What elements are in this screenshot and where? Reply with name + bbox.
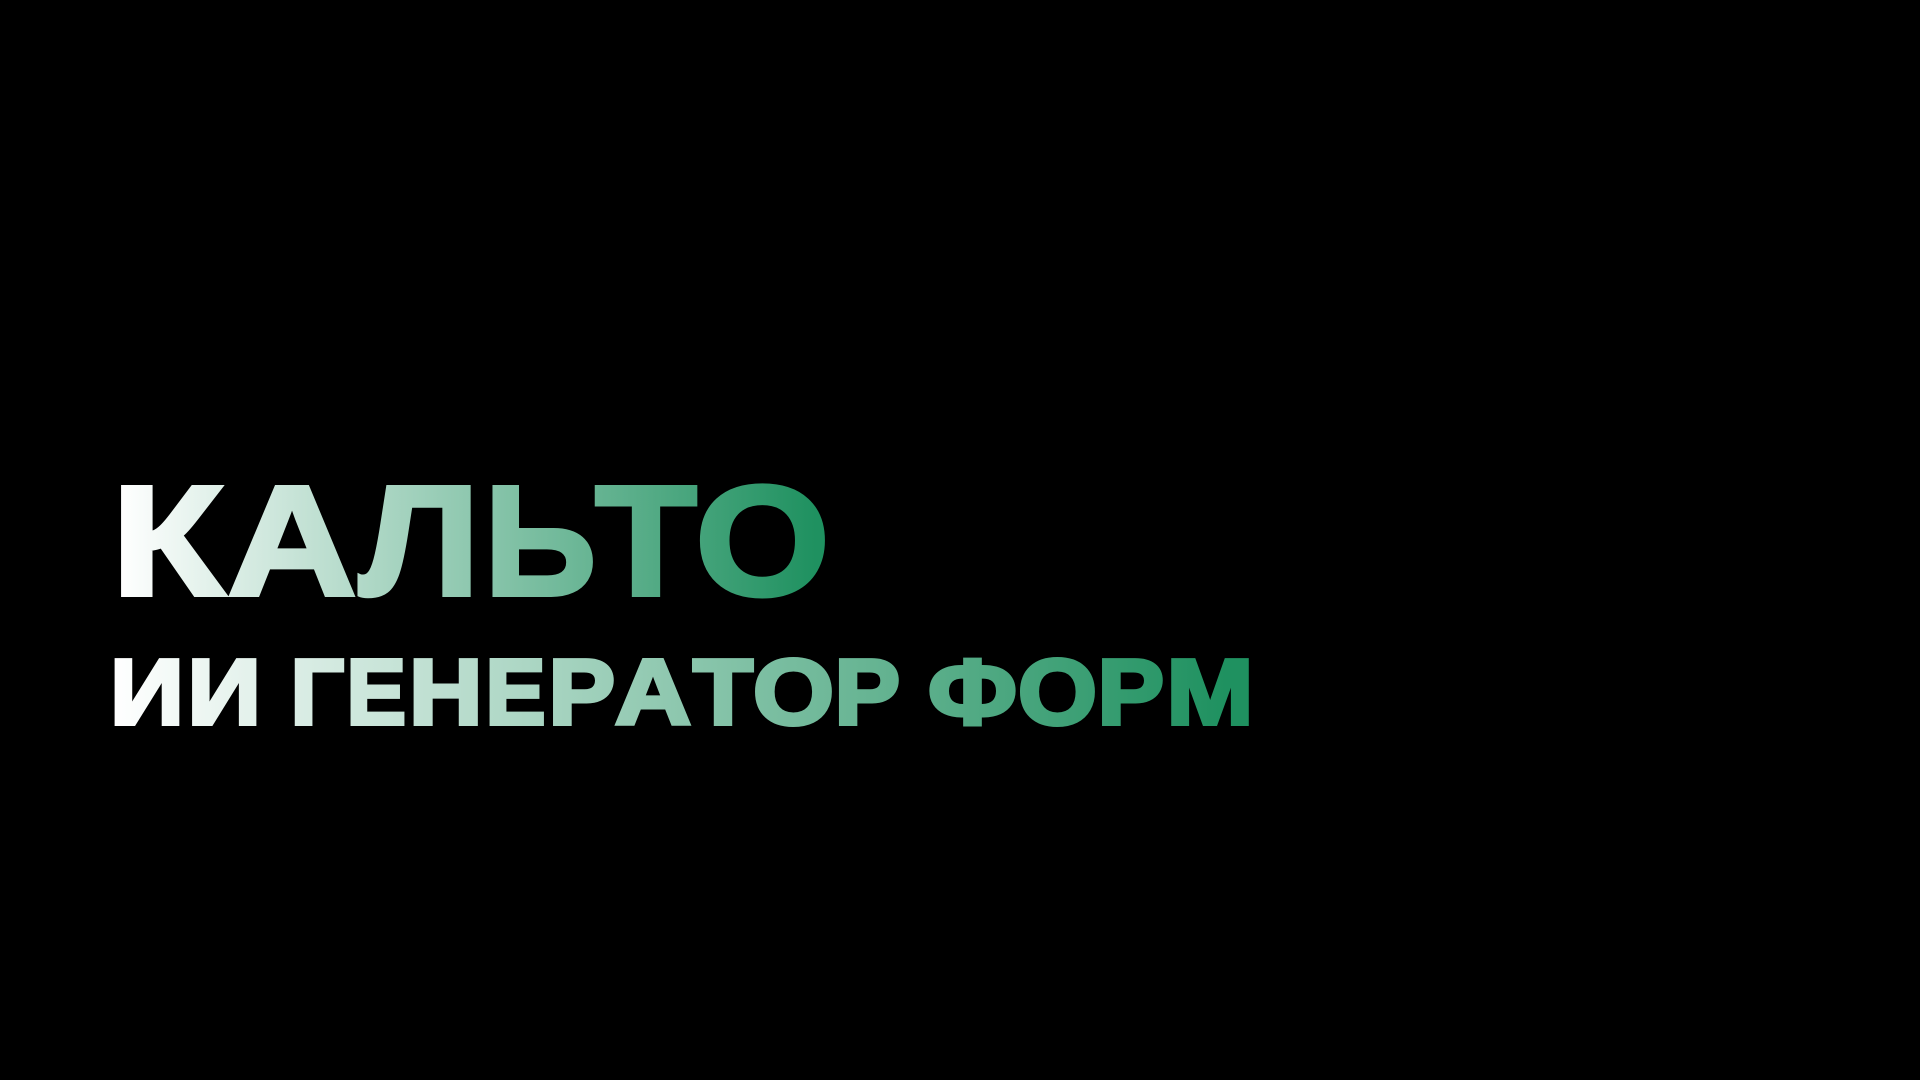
subtitle: ИИ ГЕНЕРАТОР ФОРМ: И — [110, 640, 184, 744]
subtitle: ИИ ГЕНЕРАТОР ФОРМ: А — [615, 640, 691, 744]
title: КАЛЬТО: А — [227, 454, 357, 629]
subtitle: ИИ ГЕНЕРАТОР ФОРМ: М — [1166, 640, 1254, 744]
subtitle: ИИ ГЕНЕРАТОР ФОРМ: Р — [834, 640, 900, 744]
subtitle: ИИ ГЕНЕРАТОР ФОРМ: Е — [346, 640, 406, 744]
subtitle: ИИ ГЕНЕРАТОР ФОРМ: О — [753, 640, 834, 744]
subtitle: ИИ ГЕНЕРАТОР ФОРМ: О — [1018, 640, 1097, 744]
title: КАЛЬТО: Ь — [484, 454, 596, 629]
subtitle: ИИ ГЕНЕРАТОР ФОРМ: Ф — [928, 640, 1017, 744]
title: КАЛЬТО: Л — [359, 454, 480, 629]
title: КАЛЬТО: К — [111, 454, 226, 629]
subtitle: ИИ ГЕНЕРАТОР ФОРМ: Е — [486, 640, 546, 744]
subtitle: ИИ ГЕНЕРАТОР ФОРМ: Р — [548, 640, 615, 744]
title: КАЛЬТО: О — [695, 454, 830, 629]
subtitle: ИИ ГЕНЕРАТОР ФОРМ: Г — [290, 640, 344, 744]
subtitle: ИИ ГЕНЕРАТОР ФОРМ: И — [188, 640, 261, 744]
subtitle: ИИ ГЕНЕРАТОР ФОРМ: Н — [409, 640, 482, 744]
subtitle: ИИ ГЕНЕРАТОР ФОРМ: Т — [693, 640, 753, 744]
title: КАЛЬТО: Т — [595, 454, 697, 629]
subtitle: ИИ ГЕНЕРАТОР ФОРМ: Р — [1098, 640, 1164, 744]
